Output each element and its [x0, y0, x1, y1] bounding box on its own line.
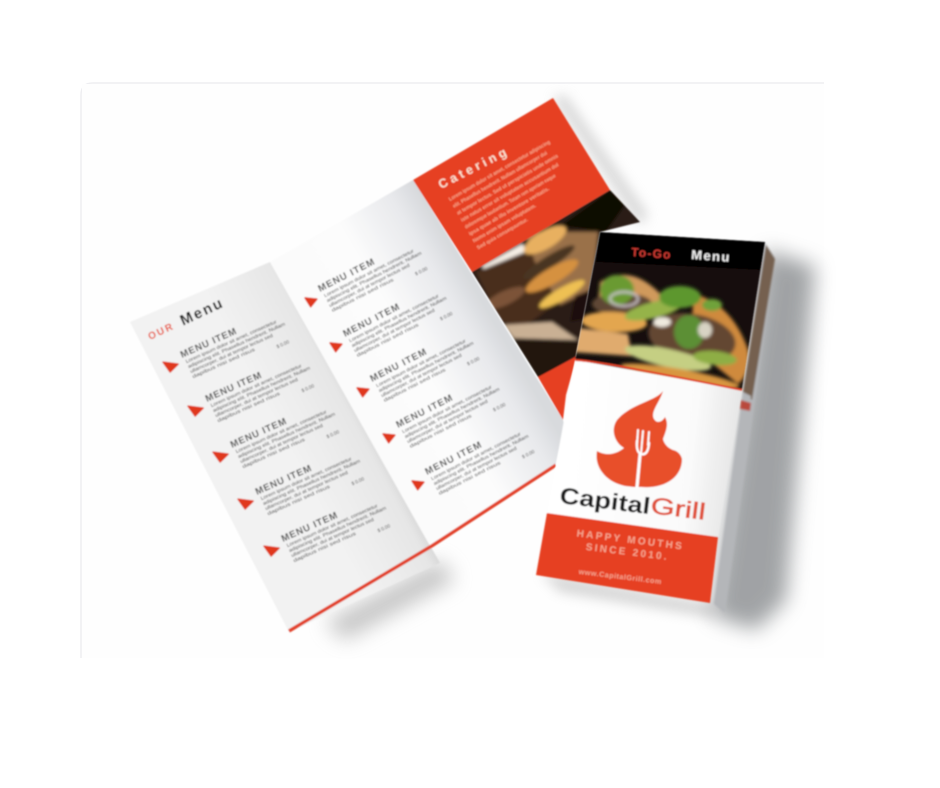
cover photo: burgers: [574, 232, 765, 393]
cover red footer: [536, 513, 718, 603]
website: www.CapitalGrill.com: [577, 567, 662, 586]
brochure mockup scene: [80, 82, 827, 658]
menu item 5: adipiscing elit. Phasellus hendrerit. Nullam: [288, 505, 387, 554]
menu item 9: [380, 372, 508, 463]
menu item 8: ullamcorper, dui at tempor lectus sed: [380, 353, 463, 399]
logo wordmark: [558, 482, 707, 525]
menu item 8: MENU ITEM: [368, 346, 429, 385]
tagline: SINCE 2010.: [585, 542, 669, 563]
menu item 4: [236, 444, 369, 532]
menu item 6: MENU ITEM: [316, 256, 377, 295]
catering body text: ipsa quae ab illo inventore veritatis.: [468, 186, 551, 237]
menu item 8: $ 0.00: [466, 356, 481, 367]
red strip under photo: [538, 356, 577, 420]
menu item 5: ullamcorper, dui at tempor lectus sed: [290, 517, 375, 559]
catering heading: Catering: [436, 144, 512, 192]
our menu heading: [145, 294, 227, 345]
to-go menu heading: To-Go: [631, 245, 672, 262]
menu item 1: [161, 307, 294, 395]
menu item 4: Lorem ipsum dolor sit amet, consectetur: [260, 456, 353, 502]
menu item 1: ullamcorper, dui at tempor lectus sed: [189, 333, 274, 375]
menu item 1: $ 0.00: [276, 339, 291, 350]
menu item 7: ullamcorper, dui at tempor lectus sed: [353, 308, 436, 354]
menu item 4: adipiscing elit. Phasellus hendrerit. Nullam: [262, 458, 361, 507]
menu item 2: Lorem ipsum dolor sit amet, consectetur: [210, 363, 303, 409]
menu item 7: dapibus nisi sed risus: [356, 322, 421, 359]
menu item 7: $ 0.00: [439, 311, 454, 322]
menu item 7: [327, 281, 455, 372]
to-go menu heading: Menu: [691, 247, 731, 265]
catering body text: iste natus error sit voluptatem accusantium dol: [460, 162, 560, 224]
menu item 6: ullamcorper, dui at tempor lectus sed: [328, 263, 411, 309]
our menu heading: OUR: [147, 321, 176, 343]
menu item 3: [211, 397, 344, 485]
menu item 8: dapibus nisi sed risus: [383, 367, 448, 404]
catering body text: at tempor lectus. Sed ut perspiciatis unde omnis: [456, 153, 560, 217]
menu item 3: MENU ITEM: [229, 416, 289, 451]
panel: middle menu panel: [270, 180, 566, 546]
menu item 3: ullamcorper, dui at tempor lectus sed: [239, 423, 324, 465]
catering body text: elit. Phasellus hendrerit. Nullam ullamcorper dui: [452, 150, 549, 210]
menu item 10: Lorem ipsum dolor sit amet, consectetur: [430, 431, 522, 482]
fork: [637, 430, 649, 487]
menu item 6: adipiscing elit. Phasellus hendrerit. Nullam: [326, 251, 423, 304]
menu item 2: MENU ITEM: [204, 370, 264, 405]
cover red rule: [575, 360, 742, 390]
menu item 4: dapibus nisi sed risus: [267, 484, 332, 517]
closed brochure: front cover: [536, 232, 765, 603]
menu item 9: adipiscing elit. Phasellus hendrerit. Nullam: [404, 387, 501, 440]
menu item 2: adipiscing elit. Phasellus hendrerit. Nullam: [212, 365, 311, 414]
menu item 10: $ 0.00: [521, 449, 536, 460]
menu item 2: ullamcorper, dui at tempor lectus sed: [214, 377, 299, 419]
red accent line: [289, 465, 556, 631]
menu item 1: adipiscing elit. Phasellus hendrerit. Nullam: [187, 321, 286, 370]
menu item 3: $ 0.00: [326, 429, 341, 440]
menu item 3: Lorem ipsum dolor sit amet, consectetur: [235, 409, 328, 455]
menu item 5: $ 0.00: [377, 523, 392, 534]
menu item 5: dapibus nisi sed risus: [293, 531, 358, 564]
menu item 9: Lorem ipsum dolor sit amet, consectetur: [401, 384, 493, 435]
menu item 6: $ 0.00: [414, 266, 429, 277]
catering photo: [472, 189, 640, 378]
left burger: [598, 275, 664, 312]
panel: catering: [413, 98, 645, 420]
menu item 5: [262, 491, 395, 579]
menu item 10: dapibus nisi sed risus: [438, 460, 503, 497]
menu item 7: adipiscing elit. Phasellus hendrerit. Nullam: [351, 296, 448, 349]
shadows under brochures: [325, 95, 815, 640]
menu item 4: ullamcorper, dui at tempor lectus sed: [264, 470, 349, 512]
menu item 3: dapibus nisi sed risus: [242, 437, 307, 470]
menu item 6: Lorem ipsum dolor sit amet, consectetur: [323, 248, 415, 299]
menu item 9: dapibus nisi sed risus: [409, 413, 474, 450]
back of folded brochure edge: [714, 243, 775, 612]
right burger: [690, 294, 749, 384]
logo wordmark: Capital: [558, 482, 652, 519]
catering body text: Nemo enim ipsam voluptatem.: [472, 203, 538, 244]
menu item 8: Lorem ipsum dolor sit amet, consectetur: [375, 338, 467, 389]
logo: flame with fork: [597, 391, 682, 487]
menu item 8: [354, 326, 482, 417]
menu item 7: MENU ITEM: [341, 301, 402, 340]
menu item 9: ullamcorper, dui at tempor lectus sed: [406, 399, 489, 445]
menu item 10: MENU ITEM: [423, 439, 484, 478]
tagline: [576, 528, 685, 563]
menu item 5: Lorem ipsum dolor sit amet, consectetur: [286, 503, 379, 549]
menu item 1: Lorem ipsum dolor sit amet, consectetur: [185, 319, 278, 365]
menu item 10: [409, 419, 537, 510]
our menu heading: Menu: [178, 294, 227, 329]
catering body text: [448, 139, 580, 251]
menu item 5: MENU ITEM: [280, 510, 340, 545]
menu item 9: MENU ITEM: [394, 392, 455, 431]
tagline: HAPPY MOUTHS: [576, 528, 685, 553]
menu item 2: dapibus nisi sed risus: [217, 391, 282, 424]
panel: left menu panel: [130, 262, 440, 632]
to-go menu heading: [630, 246, 730, 263]
logo wordmark: Grill: [649, 492, 707, 525]
catering body text: doloremque laudantium. Totam rem aperiam eaque: [464, 173, 557, 230]
menu item 1: dapibus nisi sed risus: [192, 347, 257, 380]
open brochure: inside spread: [130, 98, 645, 632]
menu item 7: Lorem ipsum dolor sit amet, consectetur: [348, 293, 440, 344]
menu item 2: [186, 351, 319, 439]
menu item 10: adipiscing elit. Phasellus hendrerit. Nullam: [433, 434, 530, 487]
menu item 4: MENU ITEM: [254, 463, 314, 498]
catering body text: Lorem ipsum dolor sit amet, consectetur adipiscing: [448, 140, 551, 203]
menu item 9: $ 0.00: [492, 402, 507, 413]
menu item 10: ullamcorper, dui at tempor lectus sed: [435, 446, 518, 492]
menu item 1: MENU ITEM: [179, 326, 239, 361]
menu item 6: dapibus nisi sed risus: [331, 277, 396, 314]
menu item 6: [302, 236, 430, 327]
menu item 8: adipiscing elit. Phasellus hendrerit. Nullam: [378, 341, 475, 394]
catering body text: Sed quia consequuntur.: [476, 217, 530, 251]
menu item 2: $ 0.00: [301, 383, 316, 394]
cover white panel: [547, 360, 742, 537]
menu item 4: $ 0.00: [351, 476, 366, 487]
menu item 3: adipiscing elit. Phasellus hendrerit. Nullam: [237, 411, 336, 460]
